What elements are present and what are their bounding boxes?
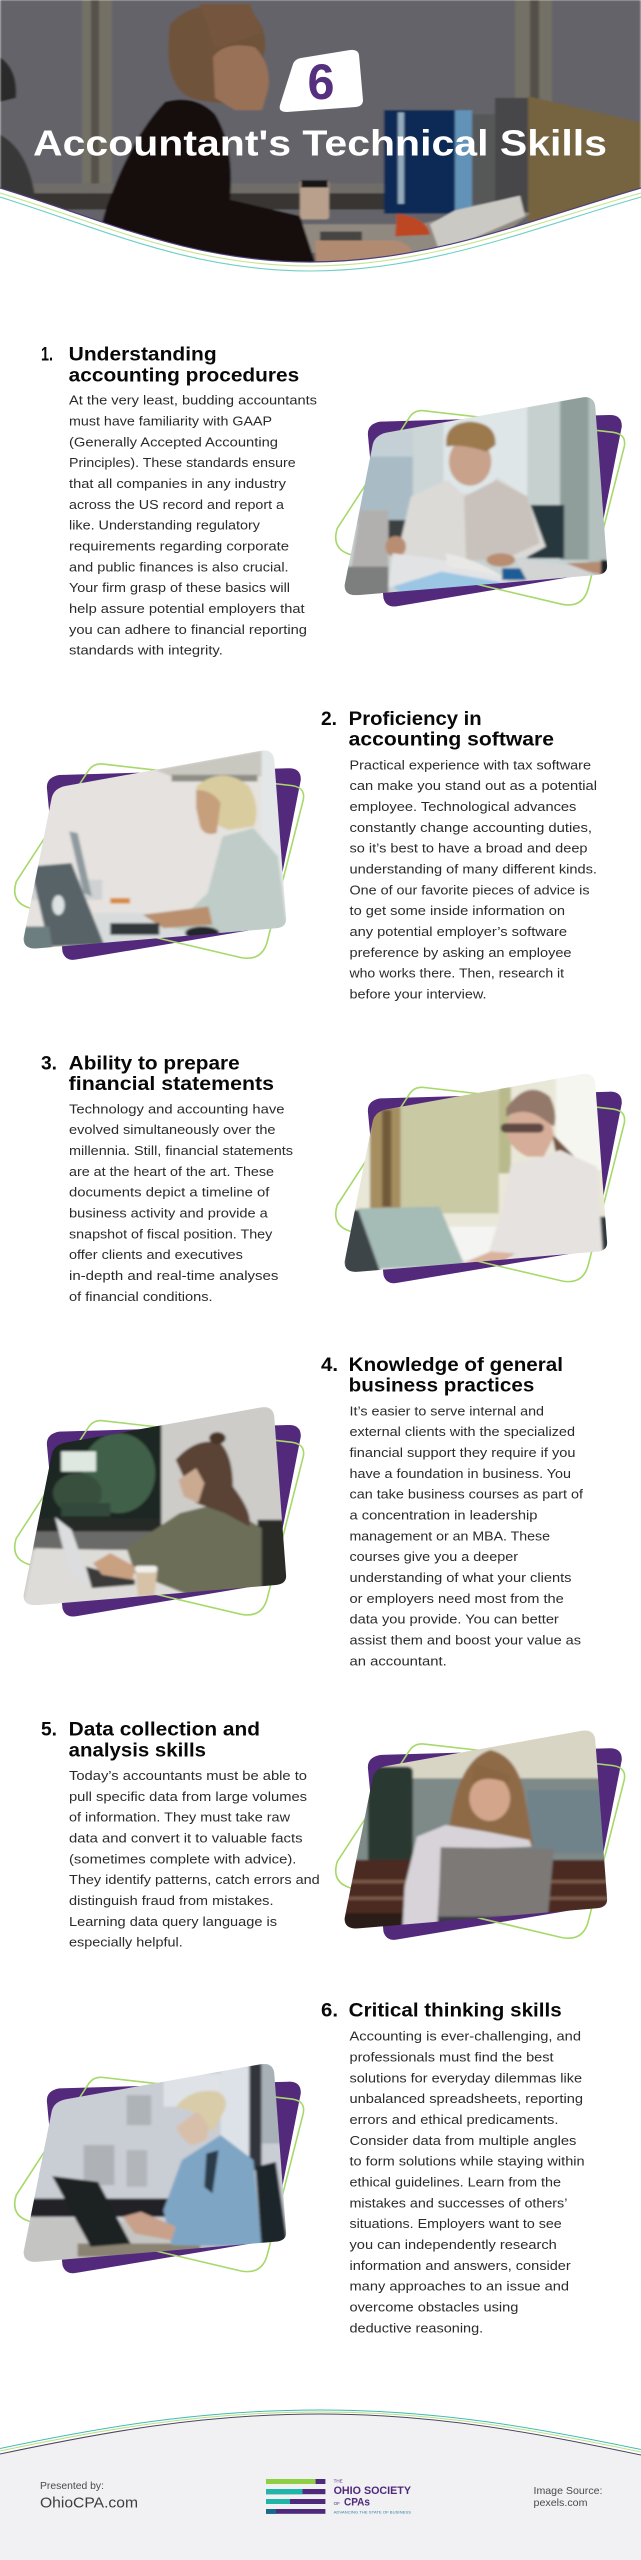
body text 1: you can adhere to financial reporting <box>69 622 307 637</box>
body text 6: ethical guidelines. Learn from the <box>350 2174 561 2190</box>
body text 4: courses give you a deeper <box>350 1549 519 1564</box>
heading 5: Data collection and <box>69 1719 260 1741</box>
body text 1: standards with integrity. <box>69 643 223 658</box>
body text 3: of financial conditions. <box>69 1289 213 1304</box>
body text 5: (sometimes complete with advice). <box>69 1851 296 1866</box>
heading 3 <box>41 1052 274 1095</box>
body text 5 <box>69 1768 320 1950</box>
logo: Ohio Society of CPAs: CPAs <box>344 2496 370 2508</box>
section 5: data collection and analysis skills <box>41 1719 625 1950</box>
body text 6: you can independently research <box>350 2237 557 2252</box>
heading 6: 6. <box>321 2000 338 2022</box>
body text 6 <box>350 2029 585 2335</box>
body text 6: errors and ethical predicaments. <box>350 2112 558 2127</box>
body text 2: One of our favorite pieces of advice is <box>350 882 590 897</box>
image 6: blonde woman in blue shirt at laptop <box>15 2060 304 2273</box>
body text 1 <box>69 393 318 658</box>
body text 6: unbalanced spreadsheets, reporting <box>350 2091 583 2106</box>
body text 1: Your firm grasp of these basics will <box>69 580 290 595</box>
body text 1: and public finances is also crucial. <box>69 559 289 574</box>
body text 4: external clients with the specialized <box>350 1424 575 1439</box>
heading 2: Proficiency in <box>349 708 482 730</box>
body text 3: snapshot of fiscal position. They <box>69 1226 273 1241</box>
body text 2: preference by asking an employee <box>350 945 572 960</box>
body text 4: It’s easier to serve internal and <box>350 1403 544 1418</box>
body text 4: can take business courses as part of <box>350 1487 583 1502</box>
body text 3: offer clients and executives <box>69 1247 243 1262</box>
presented by: OhioCPA.com <box>40 2494 138 2511</box>
body text 4: understanding of what your clients <box>350 1570 572 1585</box>
logo: Ohio Society of CPAs: ADVANCING THE STATE OF BUSINESS <box>334 2510 412 2514</box>
badge: number 6 <box>280 50 363 112</box>
body text 5: data and convert it to valuable facts <box>69 1830 303 1846</box>
logo: Ohio Society of CPAs <box>266 2478 412 2514</box>
logo: Ohio Society of CPAs: OHIO SOCIETY <box>334 2485 412 2497</box>
body text 4: an accountant. <box>350 1653 447 1668</box>
image 5: smiling woman behind laptop <box>336 1727 625 1940</box>
heading 4: 4. <box>321 1354 338 1376</box>
heading 1: 1. <box>41 344 53 366</box>
heading 6: Critical thinking skills <box>349 2000 562 2022</box>
body text 3: in-depth and real-time analyses <box>69 1268 279 1283</box>
body text 2: any potential employer’s software <box>350 924 567 939</box>
body text 2: so it’s best to have a broad and deep <box>350 841 588 856</box>
image 4: woman with bun at laptop and coffee <box>15 1403 304 1617</box>
heading 1: Understanding <box>69 344 217 366</box>
heading 4: business practices <box>349 1375 534 1397</box>
body text 6: many approaches to an issue and <box>350 2279 569 2294</box>
header photo: accountant at desk <box>0 0 641 269</box>
body text 2: before your interview. <box>350 986 486 1001</box>
body text 6: to form solutions while staying within <box>350 2154 585 2169</box>
image 2: woman typing on laptop <box>15 746 304 960</box>
heading 5: analysis skills <box>69 1740 206 1762</box>
body text 3: business activity and provide a <box>69 1206 269 1220</box>
body text 6: deductive reasoning. <box>350 2320 483 2335</box>
section 3: ability to prepare financial statements <box>41 1052 625 1304</box>
heading 2 <box>321 708 554 751</box>
heading 5: 5. <box>41 1719 57 1741</box>
heading 4 <box>321 1354 563 1397</box>
body text 6: mistakes and successes of others’ <box>350 2195 568 2210</box>
body text 4: management or an MBA. These <box>350 1528 550 1543</box>
section 6: critical thinking skills <box>15 2000 585 2335</box>
body text 4: financial support they require if you <box>350 1445 576 1460</box>
body text 3: evolved simultaneously over the <box>69 1122 276 1137</box>
section 4: knowledge of general business practices <box>15 1354 583 1668</box>
body text 5: of information. They must take raw <box>69 1810 291 1825</box>
body text 2 <box>348 757 597 1001</box>
body text 5: Today’s accountants must be able to <box>69 1768 307 1783</box>
presented by <box>40 2480 138 2511</box>
body text 6: Consider data from multiple angles <box>350 2133 577 2148</box>
body text 3: are at the heart of the art. These <box>69 1164 274 1179</box>
body text 3: documents depict a timeline of <box>69 1185 270 1200</box>
image source: pexels.com <box>534 2497 588 2509</box>
image 1: man reading documents <box>336 393 625 607</box>
body text 6: overcome obstacles using <box>350 2300 518 2314</box>
body text 2: understanding of many different kinds. <box>350 862 597 876</box>
body text 1: that all companies in any industry <box>69 476 287 491</box>
body text 4 <box>350 1403 583 1668</box>
logo: Ohio Society of CPAs: OF <box>334 2501 340 2506</box>
body text 6: Accounting is ever-challenging, and <box>350 2029 581 2044</box>
body text 2: to get some inside information on <box>350 903 565 918</box>
header wave lines <box>0 188 641 271</box>
body text 2: Practical experience with tax software <box>350 757 591 772</box>
heading 2: accounting software <box>349 729 554 751</box>
body text 3: Technology and accounting have <box>69 1101 284 1116</box>
body text 4: have a foundation in business. You <box>350 1466 571 1481</box>
body text 1: like. Understanding regulatory <box>69 518 261 533</box>
presented by: Presented by: <box>40 2480 104 2492</box>
section 2: proficiency in accounting software <box>15 708 597 1001</box>
body text 1: At the very least, budding accountants <box>69 393 318 408</box>
heading 3: Ability to prepare <box>69 1052 240 1074</box>
body text 6: professionals must find the best <box>350 2050 554 2064</box>
body text 4: a concentration in leadership <box>350 1508 538 1522</box>
heading 2: 2. <box>321 708 337 730</box>
logo: Ohio Society of CPAs: THE <box>334 2478 343 2483</box>
body text 2: who works there. Then, research it <box>348 966 564 981</box>
section 1: understanding accounting procedures <box>41 344 625 658</box>
body text 2: can make you stand out as a potential <box>350 778 597 793</box>
body text 1: across the US record and report a <box>69 497 285 512</box>
body text 6: solutions for everyday dilemmas like <box>350 2070 582 2085</box>
title: Accountant's Technical Skills <box>33 122 607 163</box>
body text 5: distinguish fraud from mistakes. <box>69 1893 274 1908</box>
image source <box>534 2485 602 2509</box>
body text 1: (Generally Accepted Accounting <box>69 434 278 449</box>
image 3: woman with glasses at laptop <box>336 1070 625 1283</box>
body text 5: pull specific data from large volumes <box>69 1789 308 1804</box>
badge: number 6: 6 <box>308 54 334 110</box>
image source: Image Source: <box>534 2485 602 2497</box>
body text 1: requirements regarding corporate <box>69 538 289 554</box>
body text 6: situations. Employers want to see <box>350 2216 562 2231</box>
heading 1: accounting procedures <box>69 364 299 386</box>
body text 1: help assure potential employers that <box>69 601 305 616</box>
body text 4: data you provide. You can better <box>350 1612 560 1627</box>
body text 4: assist them and boost your value as <box>350 1632 582 1647</box>
heading 5 <box>41 1719 260 1762</box>
heading 3: 3. <box>41 1052 57 1074</box>
body text 2: employee. Technological advances <box>350 799 577 814</box>
footer panel <box>0 2410 641 2560</box>
body text 5: especially helpful. <box>69 1935 183 1950</box>
body text 3 <box>69 1101 294 1304</box>
body text 1: Principles). These standards ensure <box>69 455 296 470</box>
body text 6: information and answers, consider <box>350 2258 571 2273</box>
body text 4: or employers need most from the <box>350 1591 564 1606</box>
body text 5: They identify patterns, catch errors and <box>69 1872 320 1887</box>
heading 3: financial statements <box>69 1073 274 1095</box>
body text 3: millennia. Still, financial statements <box>69 1143 294 1158</box>
heading 1 <box>41 344 299 386</box>
body text 2: constantly change accounting duties, <box>350 820 592 835</box>
heading 4: Knowledge of general <box>349 1354 563 1376</box>
body text 5: Learning data query language is <box>69 1914 278 1929</box>
body text 1: must have familiarity with GAAP <box>69 414 272 428</box>
